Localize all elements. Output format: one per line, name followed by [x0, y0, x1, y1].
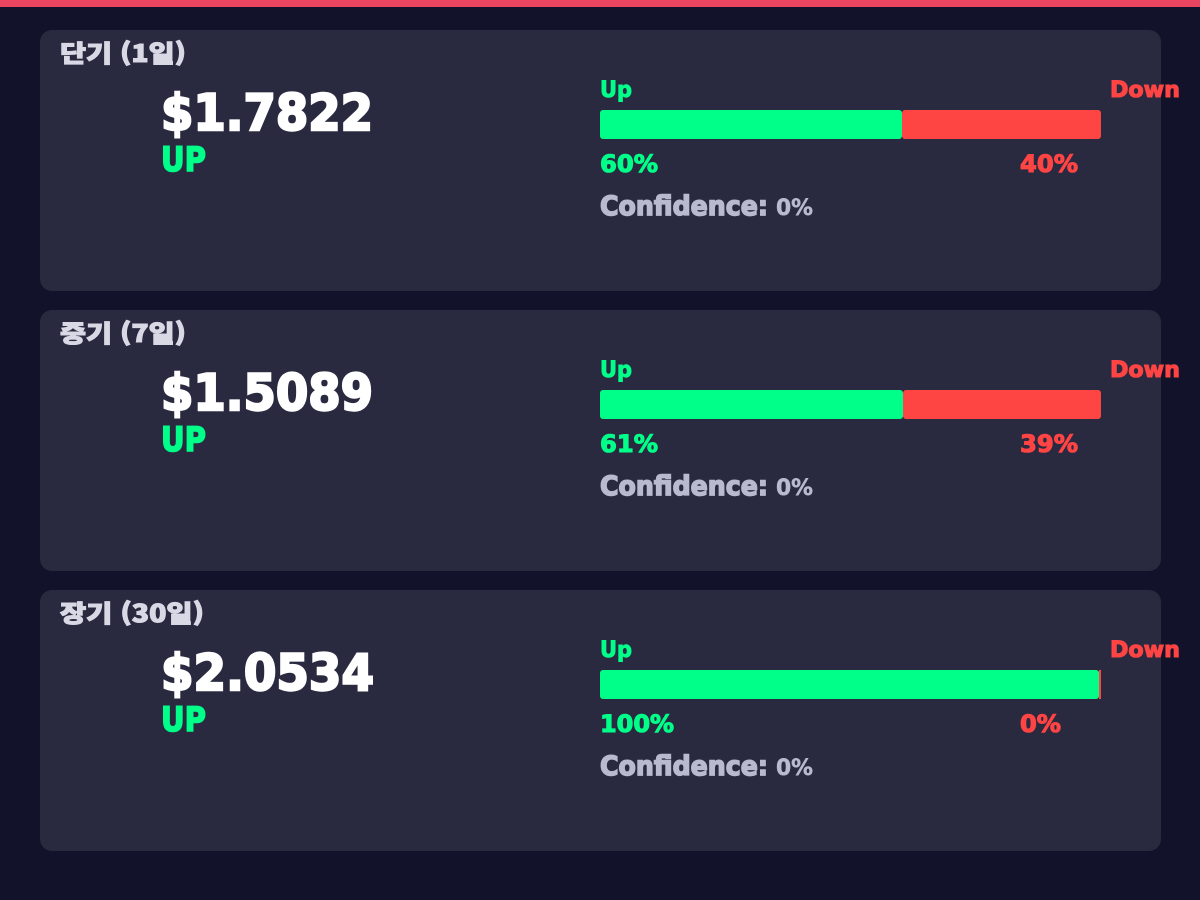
price: long term: $2.0534 [161, 644, 374, 702]
confidence: long term: Confidence: [600, 751, 768, 782]
confidence: medium term: Confidence: [600, 471, 768, 502]
label: up: Up [600, 358, 632, 383]
down percent: short term: 40% [1020, 150, 1078, 178]
confidence: long term: 0% [776, 756, 813, 781]
heading: short term: 단기 (1일) [60, 34, 186, 69]
heading: long term: 장기 (30일) [60, 594, 204, 629]
label: down: Down [1110, 78, 1180, 103]
label: down: Down [1110, 638, 1180, 663]
label: down: Down [1110, 358, 1180, 383]
probability bar: medium term [600, 390, 1101, 419]
price: medium term: $1.5089 [161, 364, 373, 422]
direction: medium term: UP [161, 420, 206, 460]
direction: long term: UP [161, 700, 206, 740]
panel: medium term [40, 310, 1180, 571]
panel background: long term [40, 590, 1161, 851]
probability bar: long term [600, 670, 1101, 699]
down percent: medium term: 39% [1020, 430, 1078, 458]
panel: short term [40, 30, 1180, 291]
label: up: Up [600, 78, 632, 103]
down percent: long term: 0% [1020, 710, 1061, 738]
confidence: short term: 0% [776, 196, 813, 221]
price: short term: $1.7822 [161, 84, 373, 142]
heading: medium term: 중기 (7일) [60, 314, 186, 349]
confidence: short term: Confidence: [600, 191, 768, 222]
panel background: short term [40, 30, 1161, 291]
up percent: medium term: 61% [600, 430, 658, 458]
up percent: short term: 60% [600, 150, 658, 178]
panel: long term [40, 590, 1180, 851]
panel background: medium term [40, 310, 1161, 571]
top accent bar [0, 0, 1200, 7]
confidence: medium term: 0% [776, 476, 813, 501]
label: up: Up [600, 638, 632, 663]
probability bar: short term [600, 110, 1101, 139]
up percent: long term: 100% [600, 710, 674, 738]
direction: short term: UP [161, 140, 206, 180]
